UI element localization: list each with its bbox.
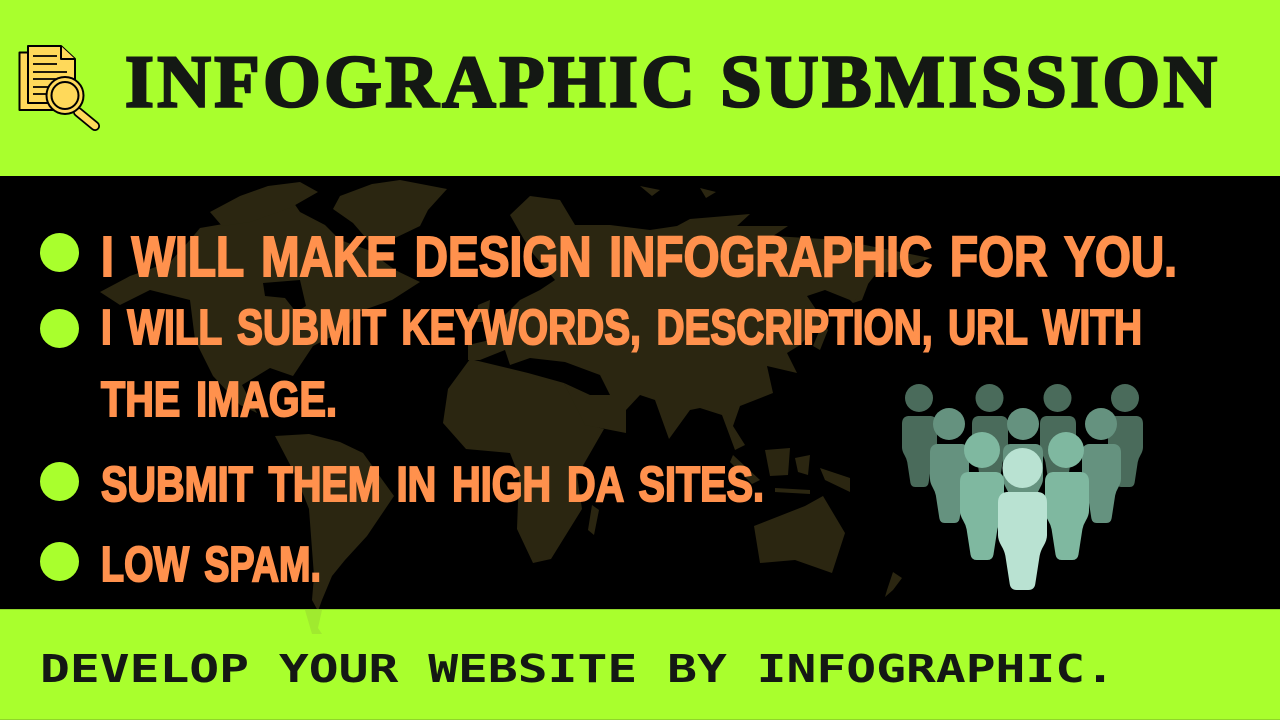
text: line 4: LOW SPAM.: [101, 538, 321, 592]
faint map tip on footer: [305, 610, 322, 634]
bullet 4: [40, 542, 79, 581]
world map: [100, 180, 930, 611]
text: line 2 continued: THE IMAGE.: [101, 373, 337, 427]
footer band: [0, 609, 1280, 720]
panel: main black background: [0, 176, 1280, 610]
icon: group of people: [902, 384, 1143, 590]
bullet 2: [40, 309, 79, 348]
Hudson Bay cutout: [263, 280, 306, 312]
bullet list: [40, 225, 1177, 592]
bullet 3: [40, 462, 79, 501]
icon: document with magnifier: [20, 46, 95, 126]
title: INFOGRAPHIC SUBMISSION: [125, 42, 1217, 124]
header band: [0, 0, 1280, 176]
footer text: DEVELOP YOUR WEBSITE BY INFOGRAPHIC.: [40, 647, 1115, 691]
text: line 3: SUBMIT THEM IN HIGH DA SITES.: [101, 458, 764, 512]
bullet 1: [40, 233, 79, 272]
